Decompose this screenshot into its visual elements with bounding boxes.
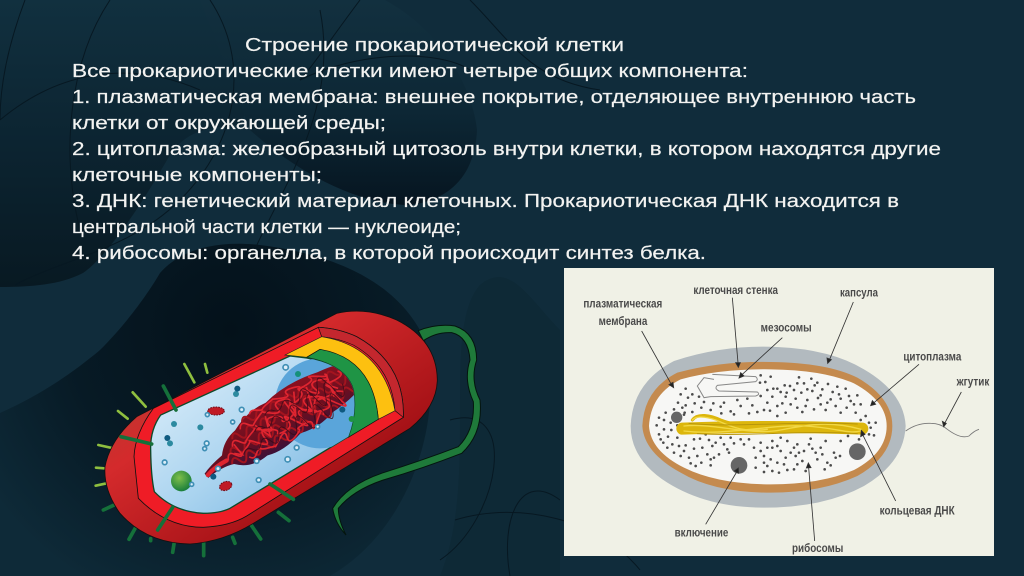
diagram labels: клеточная стенка: [693, 283, 778, 297]
diagram labels: мезосомы: [761, 320, 812, 334]
yellow layer: [285, 337, 395, 419]
diagram labels: рибосомы: [792, 541, 843, 555]
ribosomes: [162, 365, 320, 486]
text block: components of the prokaryotic cell: [72, 61, 941, 263]
embedded pili: [121, 386, 293, 530]
cell body: [105, 311, 437, 544]
text block: components of the prokaryotic cell: 4. рибосомы: органелла, в которой происходит синтез белка.: [72, 243, 706, 263]
arrows: [642, 298, 961, 541]
nucleoid DNA: [204, 366, 354, 478]
diagram labels: кольцевая ДНК: [880, 503, 955, 517]
ribosome dots: [657, 375, 876, 473]
diagram labels: включение: [675, 525, 729, 539]
text block: components of the prokaryotic cell: 3. ДНК: генетический материал клеточных. Прокариотическая ДНК находится в: [72, 191, 899, 211]
title: Строение прокариотической клетки: [245, 35, 624, 55]
text block: components of the prokaryotic cell: клеточные компоненты;: [72, 165, 322, 185]
flagellum: [906, 423, 979, 437]
pili: [96, 364, 289, 556]
mesosome: [697, 374, 759, 398]
text block: components of the prokaryotic cell: Все прокариотические клетки имеют четыре общих компонента:: [72, 61, 748, 81]
flagellum: [333, 325, 480, 535]
green layer: [307, 349, 378, 437]
text block: components of the prokaryotic cell: 2. цитоплазма: желеобразный цитозоль внутри клетки, в котором находятся другие: [72, 139, 941, 159]
diagram labels: капсула: [840, 286, 878, 300]
cut face: cell wall band: [134, 327, 403, 527]
cytoplasm: [151, 356, 355, 513]
diagram labels: мембрана: [599, 314, 648, 328]
inclusions: [671, 412, 866, 474]
green inclusion: [171, 471, 192, 491]
diagram labels: плазматическая: [583, 296, 662, 310]
text block: components of the prokaryotic cell: клетки от окружающей среды;: [72, 113, 386, 133]
text block: components of the prokaryotic cell: центральной части клетки — нуклеоиде;: [72, 217, 461, 237]
diagram labels: жгутик: [956, 374, 989, 388]
cell wall: [642, 362, 892, 493]
darker cytoplasm zone: [276, 359, 354, 448]
circular DNA: [682, 415, 862, 434]
panel: labelled diagram of a prokaryotic cell: [564, 268, 994, 556]
inner wall arc: [318, 327, 403, 417]
text block: components of the prokaryotic cell: 1. плазматическая мембрана: внешнее покрытие, отделяющее внутреннюю часть: [72, 87, 916, 107]
cytoplasm: [649, 369, 887, 484]
diagram labels: цитоплазма: [903, 350, 962, 364]
illustration: 3D bacterial cell: [96, 311, 480, 556]
capsule: [631, 347, 906, 508]
diagram labels: [583, 283, 989, 555]
dark red granules: [208, 407, 233, 492]
